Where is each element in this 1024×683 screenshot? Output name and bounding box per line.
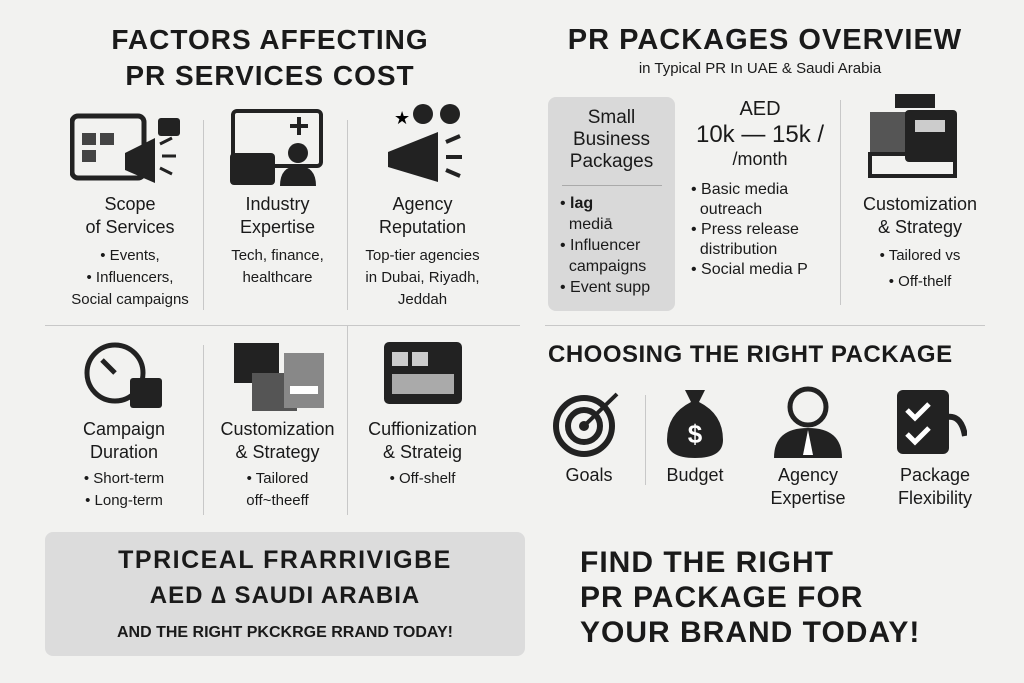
factor: customization: • Tailored xyxy=(247,470,308,487)
icon: target xyxy=(553,392,618,457)
choosing labels: Package xyxy=(900,465,970,485)
icon: person xyxy=(774,386,842,458)
small business box: • lag xyxy=(560,195,593,212)
factor: scope: • Influencers, xyxy=(87,269,173,286)
factor: cuffionization: & Strateig xyxy=(383,442,462,462)
factor: duration xyxy=(83,419,165,509)
icon: window xyxy=(384,342,462,404)
customization right: • Off-thelf xyxy=(889,273,951,290)
price column: 10k — 15k / xyxy=(696,121,824,148)
icon: megaphone reputation: ★ xyxy=(394,108,410,128)
factor: cuffionization: • Off-shelf xyxy=(390,470,455,487)
factor: cuffionization xyxy=(368,419,477,487)
factor: cuffionization: Cuffionization xyxy=(368,419,477,439)
call to action: FIND THE RIGHT xyxy=(580,546,834,579)
factor: reputation: Agency xyxy=(392,194,453,214)
icon: money bag xyxy=(667,390,723,458)
customization right xyxy=(863,194,977,290)
factor: industry xyxy=(231,194,324,286)
choosing labels: Flexibility xyxy=(898,488,972,508)
price column: /month xyxy=(732,149,788,169)
price column: AED xyxy=(739,98,781,120)
icon: puzzle xyxy=(234,343,324,411)
choosing labels: Expertise xyxy=(770,488,846,508)
factor: scope xyxy=(71,194,189,308)
icon: clock xyxy=(84,342,162,408)
customization right: • Tailored vs xyxy=(880,247,960,264)
factor: scope: Social campaigns xyxy=(71,291,189,308)
call to action: PR PACKAGE FOR xyxy=(580,581,863,614)
icon: megaphone reputation xyxy=(388,104,462,182)
price column: • Press release xyxy=(691,221,799,238)
factor: customization xyxy=(220,419,335,509)
factor: scope: • Events, xyxy=(100,247,160,264)
factor: customization: & Strategy xyxy=(235,442,320,462)
choosing labels xyxy=(565,465,972,508)
choosing labels: Budget xyxy=(666,465,724,485)
small business box: Packages xyxy=(570,151,653,172)
factor: industry: Expertise xyxy=(240,217,315,237)
small business box xyxy=(548,97,675,311)
factor: industry: Tech, finance, xyxy=(231,247,324,264)
icon: money bag: $ xyxy=(688,419,703,449)
title left xyxy=(111,24,429,91)
bottom left banner: AED ∆ SAUDI ARABIA xyxy=(150,582,420,609)
factor: reputation: Top-tier agencies xyxy=(365,247,480,264)
price column xyxy=(691,98,824,278)
call to action: YOUR BRAND TODAY! xyxy=(580,616,920,649)
small business box: campaigns xyxy=(569,258,646,275)
factor: scope: Scope xyxy=(104,194,156,214)
small business box: Small xyxy=(588,107,635,128)
icon: checklist xyxy=(897,390,967,454)
factor: reputation: Jeddah xyxy=(398,291,447,308)
price column: • Basic media xyxy=(691,181,788,198)
text: in Typical PR In UAE & Saudi Arabia xyxy=(639,60,881,77)
factor: scope: of Services xyxy=(85,217,175,237)
icon: briefcase xyxy=(230,109,323,186)
factor: duration: • Short-term xyxy=(84,470,164,487)
factor: industry: Industry xyxy=(245,194,310,214)
customization right: Customization xyxy=(863,194,977,214)
bottom left banner xyxy=(45,532,525,656)
small business box: • Influencer xyxy=(560,237,640,254)
factor: reputation xyxy=(365,194,480,308)
bottom left banner: AND THE RIGHT PKCKRGE RRAND TODAY! xyxy=(117,624,453,641)
small business box: • Event supp xyxy=(560,279,650,296)
factor: customization: off~theeff xyxy=(246,492,309,509)
factor: industry: healthcare xyxy=(242,269,313,286)
price column: distribution xyxy=(700,241,777,258)
factor: duration: • Long-term xyxy=(85,492,163,509)
factor: duration: Campaign xyxy=(83,419,165,439)
price column: outreach xyxy=(700,201,762,218)
choosing labels: Goals xyxy=(565,465,613,485)
bottom left banner: TPRICEAL FRARRIVIGBE xyxy=(118,546,452,574)
factor: reputation: in Dubai, Riyadh, xyxy=(365,269,480,286)
factor: reputation: Reputation xyxy=(379,217,466,237)
call to action xyxy=(580,546,920,649)
choosing heading: CHOOSING THE RIGHT PACKAGE xyxy=(548,341,953,368)
price column: • Social media P xyxy=(691,261,808,278)
title right: PR PACKAGES OVERVIEW xyxy=(568,24,962,56)
factor: duration: Duration xyxy=(90,442,158,462)
title left: PR SERVICES COST xyxy=(125,60,415,91)
icon: strategy xyxy=(868,94,957,178)
small business box: mediā xyxy=(569,216,612,233)
small business box: Business xyxy=(573,129,650,150)
customization right: & Strategy xyxy=(878,217,962,237)
icon: calendar megaphone xyxy=(70,114,180,183)
title left: FACTORS AFFECTING xyxy=(111,24,429,55)
choosing labels: Agency xyxy=(778,465,838,485)
factor: customization: Customization xyxy=(220,419,335,439)
